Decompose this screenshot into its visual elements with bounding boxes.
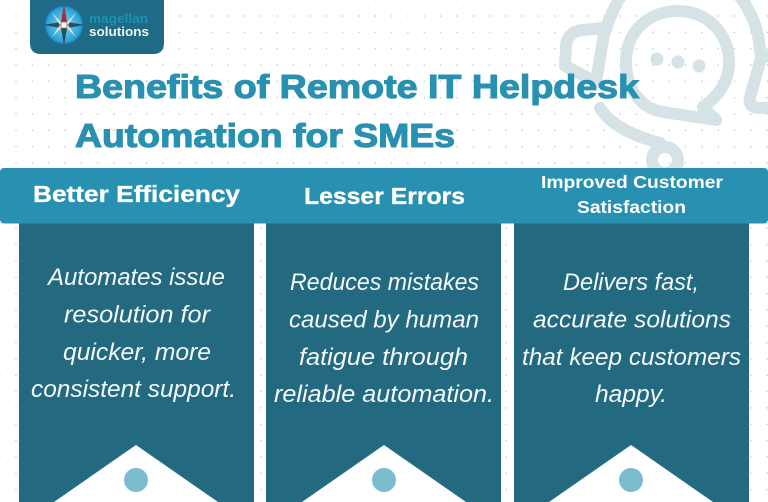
icon: typing dots bbox=[650, 52, 706, 72]
body text: caused by human bbox=[289, 306, 479, 334]
icon: chat bubble outline bbox=[626, 11, 729, 120]
title: Benefits of Remote IT Helpdesk bbox=[75, 68, 640, 105]
body text: Reduces mistakes bbox=[290, 269, 479, 296]
icon: compass bbox=[43, 4, 85, 46]
icon: right ear cup bbox=[749, 55, 768, 108]
notch with dot bbox=[302, 445, 466, 502]
body text: resolution for bbox=[64, 302, 211, 328]
logo wordmark: magellan: magellan bbox=[89, 11, 148, 26]
panel: improved customer satisfaction bbox=[514, 220, 749, 502]
heading: improved customer satisfaction bbox=[541, 172, 723, 217]
body text: happy. bbox=[595, 381, 667, 408]
panel: lesser errors bbox=[266, 220, 501, 502]
body text: that keep customers bbox=[522, 344, 741, 371]
heading: improved customer satisfaction: Satisfaction bbox=[577, 197, 686, 217]
heading: better efficiency: Better Efficiency bbox=[33, 181, 240, 207]
panel: better efficiency bbox=[19, 220, 254, 502]
body text: fatigue through bbox=[299, 344, 468, 371]
body text: Delivers fast, bbox=[563, 269, 699, 296]
body text: accurate solutions bbox=[533, 306, 731, 334]
title: Automation for SMEs bbox=[75, 117, 455, 154]
icon: microphone tip bbox=[652, 147, 678, 173]
logo wordmark: solutions: solutions bbox=[89, 24, 149, 39]
title bbox=[75, 68, 640, 154]
body text bbox=[274, 269, 494, 408]
notch with dot bbox=[549, 445, 713, 502]
notch with dot bbox=[54, 445, 218, 502]
header bar bbox=[0, 168, 768, 224]
icon: headset support agent with chat bubble bbox=[565, 0, 768, 173]
body text: quicker, more bbox=[63, 339, 211, 366]
icon: left ear cup bbox=[565, 28, 605, 82]
icon: headband arc bbox=[606, 0, 760, 52]
body text bbox=[31, 264, 236, 403]
heading: improved customer satisfaction: Improved Customer bbox=[541, 172, 723, 192]
body text bbox=[522, 269, 741, 408]
body text: consistent support. bbox=[31, 376, 236, 403]
logo: Magellan Solutions badge bbox=[30, 0, 164, 54]
heading: lesser errors: Lesser Errors bbox=[304, 183, 465, 209]
icon: microphone boom bbox=[600, 108, 660, 143]
body text: reliable automation. bbox=[274, 381, 494, 408]
body text: Automates issue bbox=[46, 264, 225, 291]
